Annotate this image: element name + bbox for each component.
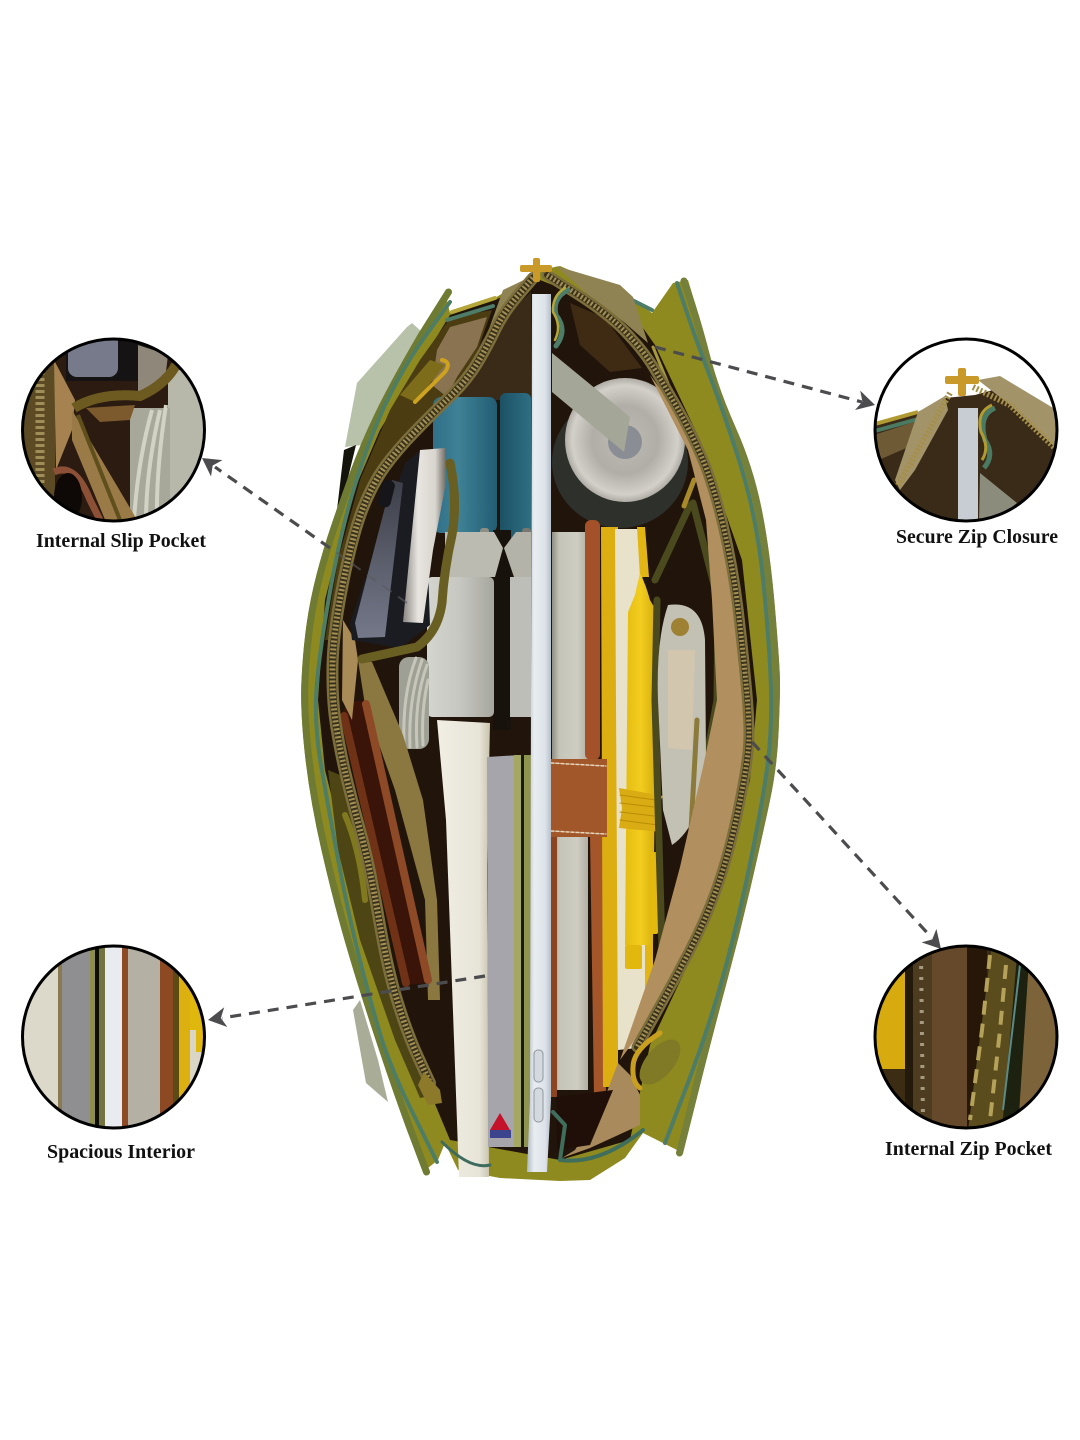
- detail image: zip closure: [876, 368, 1056, 520]
- dark floor below books: [556, 1090, 613, 1150]
- left tan pocket flap: [358, 660, 440, 1000]
- detail image: zip pocket: [874, 944, 1060, 1130]
- zip tape top right: [556, 266, 648, 343]
- yellow pen: [619, 573, 663, 969]
- black shadow behind bag: [337, 445, 356, 510]
- water bottle body: [552, 396, 688, 528]
- arrow: secure zip closure: [655, 347, 878, 415]
- arrow: spacious interior: [206, 976, 485, 1030]
- bag with contents: [301, 258, 780, 1181]
- bottom tan lining: [562, 1063, 640, 1158]
- left zipper: [332, 278, 533, 1083]
- wallet: [342, 701, 428, 985]
- centre tablet edge: [527, 294, 551, 1172]
- white book: [437, 720, 490, 1177]
- left bottom fold: [442, 1142, 490, 1166]
- label: Internal Slip Pocket: [36, 530, 206, 552]
- label: Spacious Interior: [47, 1141, 195, 1163]
- yellow strap loop: [553, 288, 565, 340]
- circle ring: [875, 946, 1057, 1128]
- label: Internal Zip Pocket: [885, 1138, 1052, 1160]
- grey book: [487, 755, 531, 1147]
- right bottom fold: [553, 1112, 643, 1161]
- circle ring: [22, 946, 204, 1128]
- zip pocket bands: [655, 480, 718, 985]
- arrow: internal zip pocket: [752, 742, 948, 956]
- charger right: [504, 528, 531, 717]
- upper left tan patch: [432, 317, 487, 397]
- left edge binding: [305, 292, 450, 1172]
- circle ring: [875, 339, 1057, 521]
- bottle steel lid: [565, 378, 685, 502]
- charger gap shadow: [493, 530, 511, 730]
- left lower olive fold: [345, 815, 365, 900]
- yellow notebook: [601, 527, 653, 1087]
- top rim teal: [447, 300, 652, 320]
- small coin pouch: [658, 604, 706, 845]
- upper left lining: [325, 310, 492, 640]
- left tan sliver: [342, 620, 358, 720]
- label: Secure Zip Closure: [896, 526, 1058, 548]
- left lower pocket olive area: [328, 770, 436, 1098]
- bottle lid hole: [608, 425, 642, 459]
- lower strap ring: [632, 1032, 688, 1092]
- teal block rear right: [500, 393, 531, 543]
- bag outer silhouette: [301, 266, 780, 1181]
- pale back panel, lower left: [353, 1000, 388, 1102]
- upper strap ring: [400, 360, 448, 402]
- teal block rear left: [433, 397, 497, 533]
- cables: [399, 657, 429, 749]
- right grey-page book: [550, 520, 606, 1097]
- right edge binding: [665, 281, 776, 1153]
- olive strip along right zipper: [653, 347, 690, 437]
- right tan lining: [620, 375, 746, 1060]
- green strap loop: [555, 290, 568, 346]
- circle ring: [22, 339, 204, 521]
- webbing strap: [552, 353, 630, 452]
- pale back panel, upper left: [345, 323, 422, 447]
- zip slider: [520, 258, 552, 282]
- phone: [350, 448, 455, 659]
- callout: secure zip closure: [874, 336, 1060, 548]
- callout: spacious interior: [20, 944, 208, 1163]
- bag interior: [318, 280, 757, 1160]
- callout: internal zip pocket: [874, 944, 1060, 1160]
- lower left zip end: [418, 1072, 442, 1105]
- detail image: stacked books: [20, 944, 208, 1130]
- zip tape top left: [485, 277, 530, 340]
- charger left: [427, 528, 503, 717]
- callout: internal slip pocket: [20, 330, 208, 552]
- rear interior shadow: [440, 292, 531, 400]
- detail image: slip pocket: [24, 340, 203, 520]
- leather band: [550, 759, 607, 837]
- arrow: internal slip pocket: [196, 450, 407, 603]
- right interior lining top: [570, 303, 642, 372]
- right zipper: [547, 275, 749, 1047]
- top rim: [452, 298, 495, 312]
